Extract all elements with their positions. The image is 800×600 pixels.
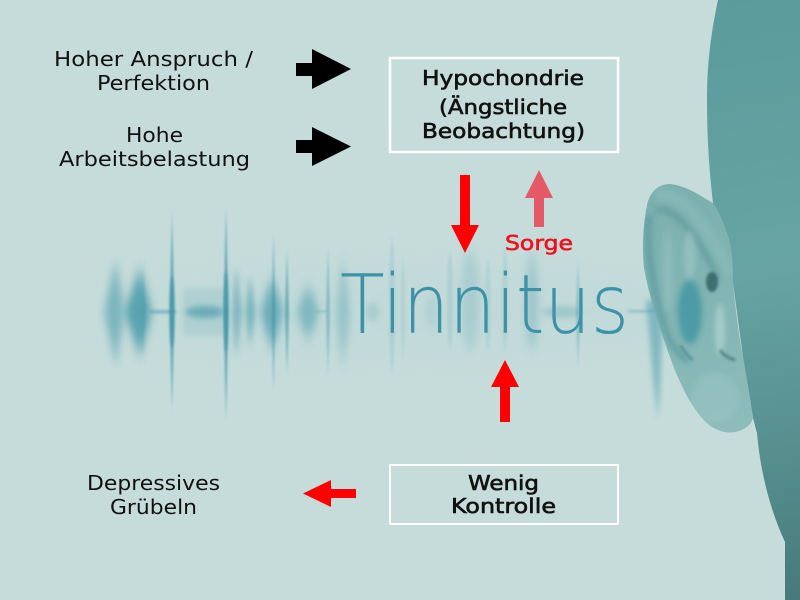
box: Hypochondrie — [390, 58, 618, 152]
box: Wenig Kontrolle: Wenig — [468, 471, 539, 495]
text: Hoher Anspruch / Perfektion: Perfektion — [97, 71, 210, 95]
box: Hypochondrie: Beobachtung) — [422, 119, 585, 143]
head silhouette — [640, 0, 800, 600]
text: Depressives Grübeln — [87, 471, 220, 519]
box: Hypochondrie: Hypochondrie — [422, 66, 584, 90]
title: Tinnitus: Tinnitus — [340, 258, 629, 353]
text: Depressives Grübeln: Grübeln — [110, 495, 197, 519]
box: Wenig Kontrolle — [390, 465, 618, 524]
arrow: red left — [303, 480, 356, 507]
sound wave — [100, 208, 700, 420]
arrow: black top — [296, 49, 351, 89]
arrow: faded red up — [525, 170, 553, 227]
arrow: black lower — [296, 127, 351, 166]
box: Wenig Kontrolle: Kontrolle — [451, 494, 556, 518]
text: Hoher Anspruch / Perfektion: Hoher Anspruch / — [54, 47, 253, 71]
text: Hoher Anspruch / Perfektion — [54, 47, 253, 95]
icon: ear — [643, 184, 753, 432]
arrow: red down — [451, 175, 479, 253]
text: Hohe Arbeitsbelastung — [59, 123, 250, 171]
text: Hohe Arbeitsbelastung: Hohe — [126, 123, 183, 147]
text: Hohe Arbeitsbelastung: Arbeitsbelastung — [59, 147, 250, 171]
arrow: red up — [491, 360, 519, 422]
box: Hypochondrie: (Ängstliche — [439, 95, 567, 119]
text: Depressives Grübeln: Depressives — [87, 471, 220, 495]
label: Sorge: Sorge — [505, 231, 573, 255]
